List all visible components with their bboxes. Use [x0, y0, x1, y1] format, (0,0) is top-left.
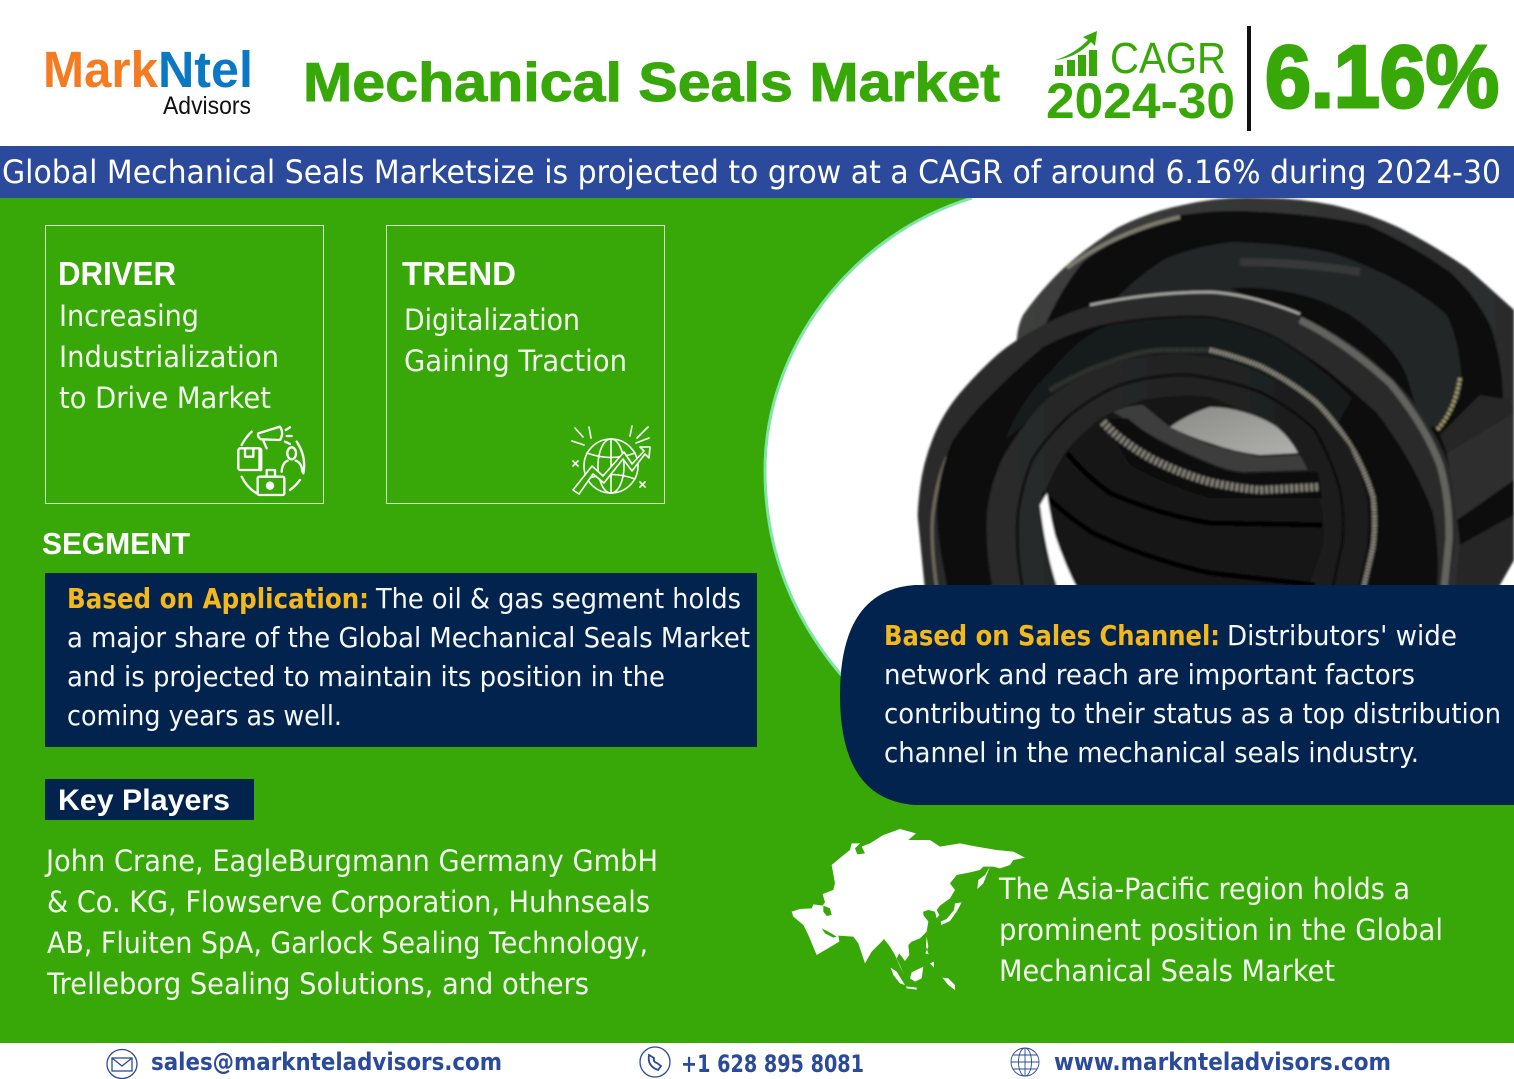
key players list: & Co. KG, Flowserve Corporation, Huhnseals	[47, 885, 650, 919]
CAGR block: 2024-30	[1046, 73, 1235, 129]
panel: trend: TREND	[402, 255, 516, 292]
footer: phone: +1 628 895 8081	[681, 1050, 864, 1078]
panel: sales channel: channel in the mechanical seals industry.	[884, 737, 1419, 769]
CAGR value: 6.16%	[1265, 27, 1499, 126]
footer: email: sales@marknteladvisors.com	[151, 1048, 502, 1076]
Asia-Pacific text: The Asia-Pacific region holds a	[998, 872, 1410, 906]
header band	[0, 0, 1514, 146]
panel: sales channel: Based on Sales Channel:	[884, 620, 1220, 652]
footer: phone	[640, 1047, 864, 1078]
icon: envelope	[107, 1050, 137, 1078]
heading: key players	[45, 779, 254, 820]
panel: driver: DRIVER	[58, 255, 176, 292]
key players list	[44, 844, 658, 1001]
panel: based on application: and is projected to maintain its position in the	[67, 661, 665, 693]
icon: megaphone, box, person and toolkit	[238, 427, 304, 495]
icon: globe with rising arrow	[572, 426, 650, 494]
trend text: Gaining Traction	[404, 344, 627, 378]
CAGR block	[1046, 31, 1235, 129]
key players list: AB, Fluiten SpA, Garlock Sealing Technology,	[47, 926, 648, 960]
panel: based on application: Based on Application:	[67, 583, 369, 615]
panel: based on application: a major share of the Global Mechanical Seals Market	[67, 622, 750, 654]
heading: key players: Key Players	[58, 784, 230, 817]
panel: white photo area with mint edge	[765, 198, 1514, 700]
green main area	[0, 198, 1514, 1043]
key players list: Trelleborg Sealing Solutions, and others	[46, 967, 589, 1001]
driver text: Increasing	[59, 299, 199, 333]
panel: based on application: The oil & gas segment holds	[375, 583, 741, 615]
map: Asia-Pacific	[792, 829, 1025, 990]
Asia-Pacific text	[998, 872, 1443, 988]
panel: sales channel	[840, 585, 1514, 805]
footer band	[0, 1043, 1514, 1079]
back seal	[1000, 198, 1514, 590]
panel: sales channel: network and reach are important factors	[884, 659, 1415, 691]
panel: trend	[386, 226, 664, 504]
logo	[43, 41, 253, 120]
footer: website: www.marknteladvisors.com	[1054, 1048, 1391, 1076]
panel: based on application: coming years as well.	[67, 700, 342, 732]
key players list: John Crane, EagleBurgmann Germany GmbH	[44, 844, 658, 878]
title: Mechanical Seals Market	[303, 51, 1000, 113]
panel: driver	[46, 226, 324, 504]
icon: telephone	[640, 1047, 670, 1077]
icon: globe	[1011, 1048, 1039, 1076]
panel: product photo of mechanical seals	[918, 198, 1514, 590]
garter spring	[1050, 350, 1374, 590]
Asia-Pacific text: prominent position in the Global	[999, 913, 1443, 947]
divider	[1247, 26, 1251, 131]
trend text: Digitalization	[404, 303, 580, 337]
logo: Mark	[43, 41, 159, 98]
driver text: Industrialization	[59, 340, 279, 374]
driver text	[59, 299, 279, 415]
logo: Advisors	[163, 92, 251, 120]
icon: growth bars and arrow	[1055, 31, 1097, 76]
heading: segment: SEGMENT	[42, 526, 190, 561]
seal hole	[1040, 396, 1324, 590]
CAGR block: CAGR	[1110, 34, 1226, 83]
trend text	[404, 303, 627, 378]
logo: Ntel	[158, 41, 253, 98]
panel: sales channel: Distributors' wide	[1227, 620, 1457, 652]
driver text: to Drive Market	[59, 381, 271, 415]
panel: based on application	[45, 573, 757, 747]
front seal	[918, 292, 1456, 590]
Asia-Pacific text: Mechanical Seals Market	[999, 954, 1335, 988]
lip inner ring edge	[1017, 375, 1343, 590]
